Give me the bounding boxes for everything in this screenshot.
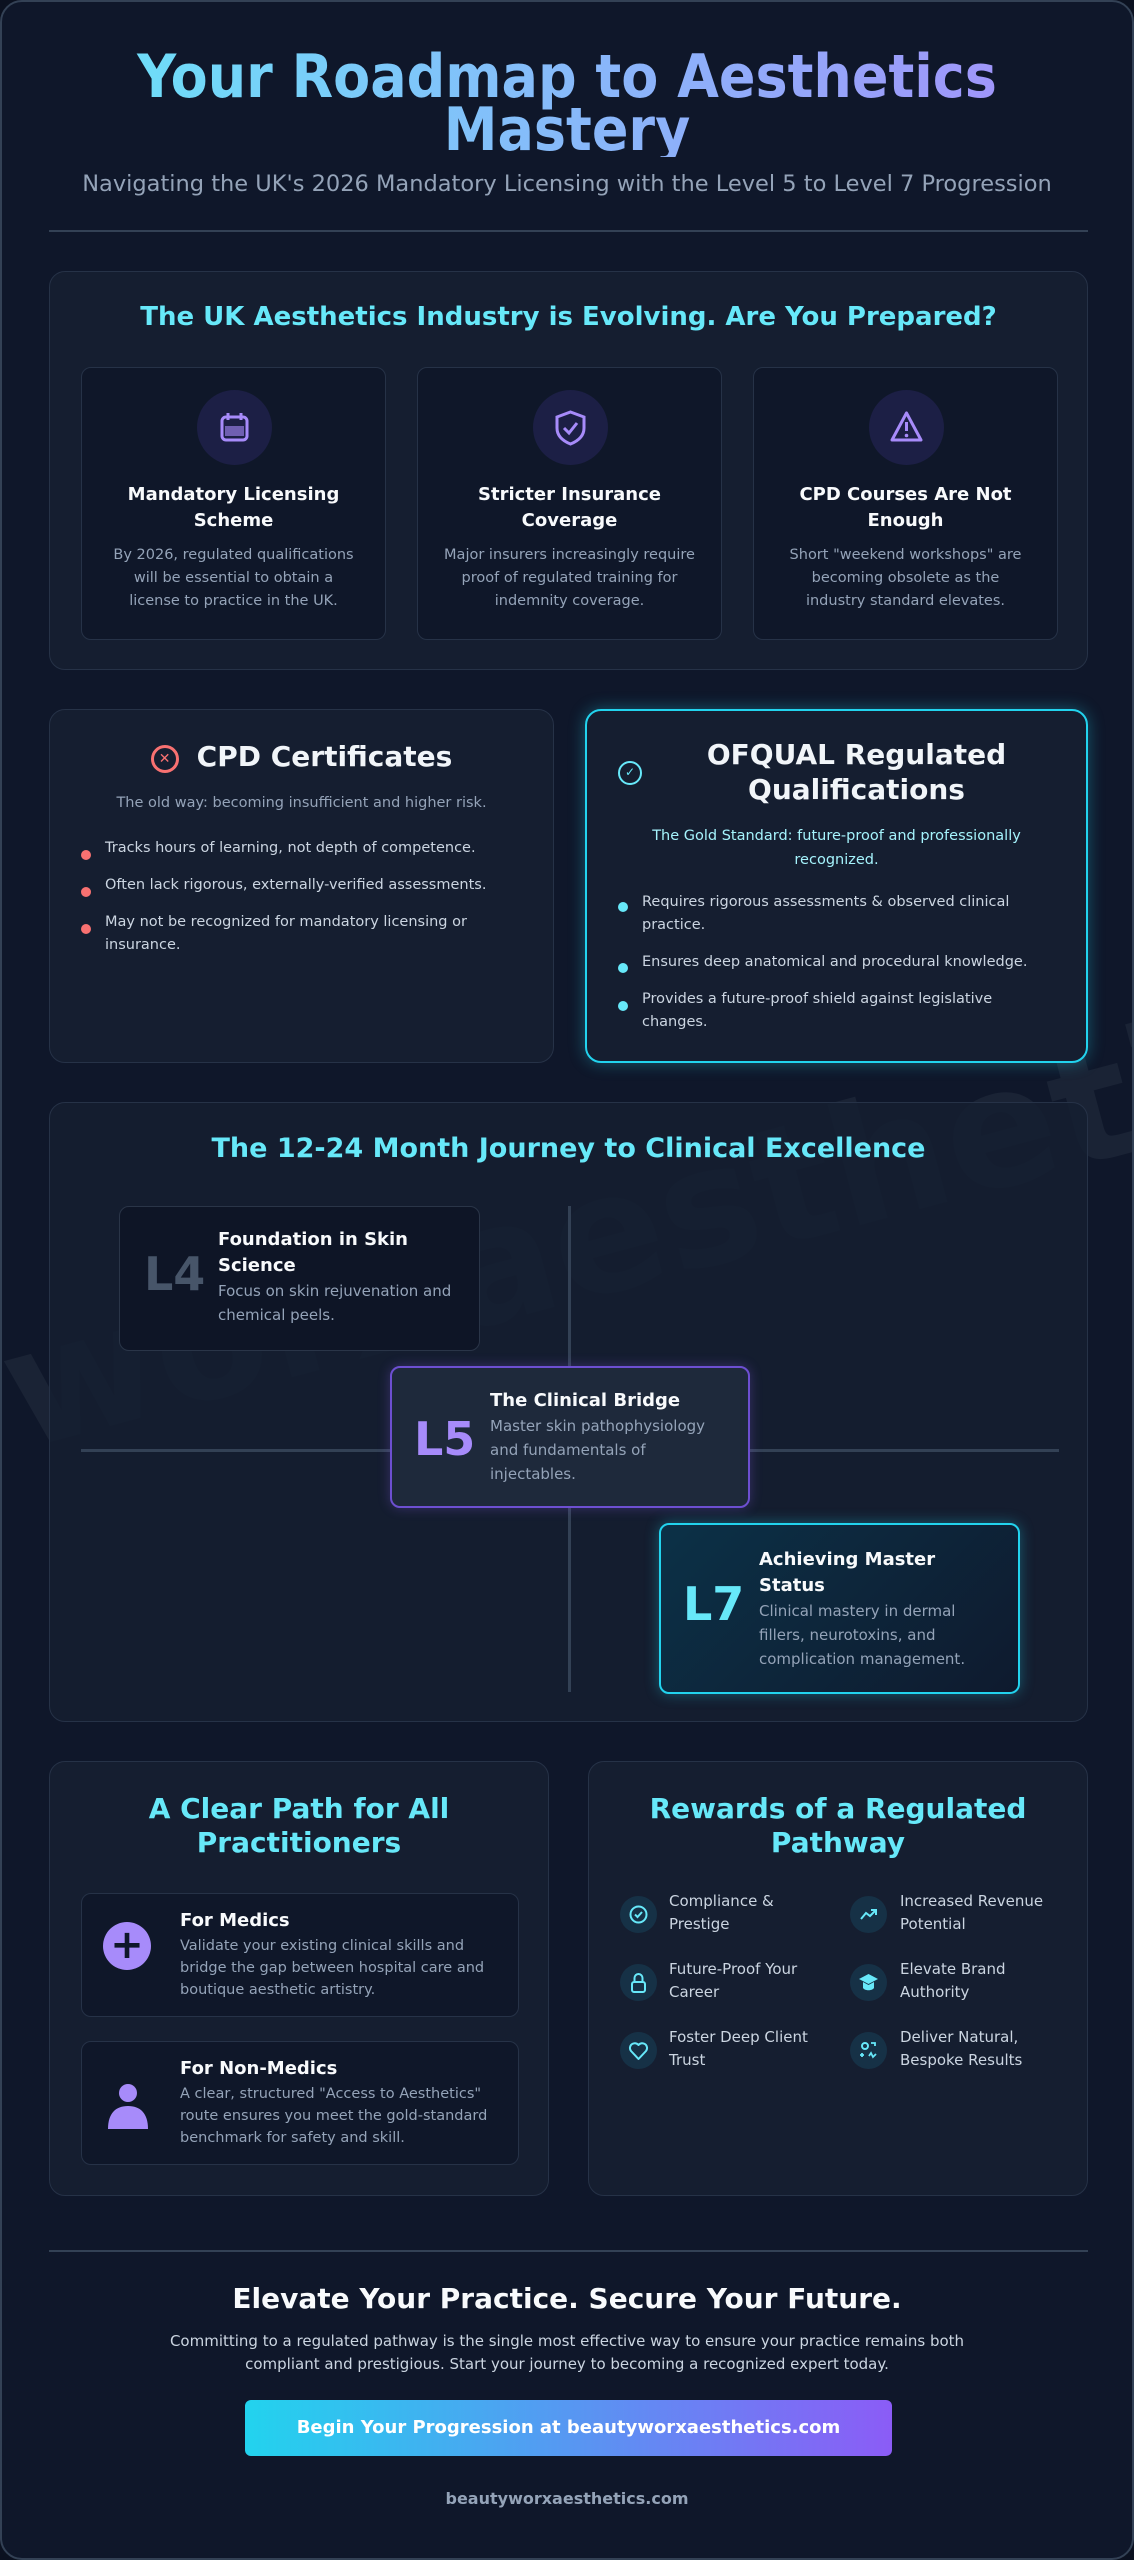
panel: CPD certificates <box>49 709 554 1063</box>
reward items: Deliver Natural, <box>900 2028 1018 2046</box>
card: insurance: Coverage <box>522 510 617 531</box>
heading: The 12-24 Month Journey to Clinical Excellence <box>211 1133 926 1164</box>
title: Your Roadmap to Aesthetics Mastery <box>137 42 997 165</box>
card: CPD not enough: Short "weekend workshops" are becoming obsolete as the industry standard elevates. <box>790 547 1021 609</box>
reward items: Authority <box>900 1983 969 2001</box>
card: CPD not enough: Enough <box>868 510 944 531</box>
reward items: Potential <box>900 1915 966 1933</box>
button <box>245 2400 892 2456</box>
icon: calendar <box>197 390 272 465</box>
icon: check: ✓ <box>625 765 635 779</box>
card: CPD not enough <box>753 367 1058 640</box>
card: medics: For Medics <box>180 1910 290 1931</box>
panel: rewards <box>588 1761 1088 2196</box>
bullets: Provides a future-proof shield against legislative changes. <box>642 991 992 1030</box>
card: licensing <box>81 367 386 640</box>
bullets: May not be recognized for mandatory licensing or insurance. <box>105 914 467 953</box>
bullets: Requires rigorous assessments & observed clinical practice. <box>642 894 1009 933</box>
button: Begin Your Progression at beautyworxaesthetics.com <box>297 2417 840 2438</box>
CTA text: Committing to a regulated pathway is the single most effective way to ensure your practice remains both compliant and prestigious. Start your journey to becoming a recognized expert today. <box>170 2332 964 2373</box>
panel: OFQUAL <box>585 709 1088 1063</box>
level card: L4: Science <box>218 1255 296 1276</box>
panel: CPD certificates: The old way: becoming insufficient and higher risk. <box>116 795 487 811</box>
bullets <box>81 840 486 953</box>
heading: The UK Aesthetics Industry is Evolving. Are You Prepared? <box>140 302 997 332</box>
CTA heading: Elevate Your Practice. Secure Your Future. <box>232 2282 902 2315</box>
icon: person <box>108 2084 148 2129</box>
heading: A Clear Path for All Practitioners <box>149 1792 449 1859</box>
icon: check <box>618 761 642 785</box>
panel: clear path <box>49 1761 549 2196</box>
bullets: Tracks hours of learning, not depth of competence. <box>105 840 476 856</box>
card: insurance <box>417 367 722 640</box>
level card: L5: L5 <box>414 1412 475 1466</box>
reward items: Future-Proof Your <box>669 1960 797 1978</box>
heading: OFQUAL Regulated Qualifications <box>707 738 1006 806</box>
heading: ✕ <box>159 751 171 767</box>
reward items: Bespoke Results <box>900 2051 1022 2069</box>
icon: plus <box>103 1922 151 1970</box>
level card: L4: Foundation in Skin <box>218 1229 408 1250</box>
card: non-medics <box>81 2041 519 2165</box>
bullets: Ensures deep anatomical and procedural knowledge. <box>642 954 1027 970</box>
heading: Rewards of a Regulated Pathway <box>650 1792 1026 1859</box>
level card: L7: Status <box>759 1575 825 1596</box>
bullets <box>618 894 1027 1030</box>
level card: L5: Master skin pathophysiology and fundamentals of injectables. <box>490 1417 705 1483</box>
panel: industry evolving <box>49 271 1088 670</box>
card: medics <box>81 1893 519 2017</box>
heading: CPD Certificates <box>197 740 452 773</box>
reward items: Prestige <box>669 1915 729 1933</box>
level card: L7: L7 <box>683 1577 744 1631</box>
reward items <box>620 1892 1043 2069</box>
level card: L7: Clinical mastery in dermal fillers, neurotoxins, and complication management. <box>759 1602 965 1668</box>
bullets: Often lack rigorous, externally-verified assessments. <box>105 877 486 893</box>
title <box>2 51 1132 157</box>
card: non-medics: A clear, structured "Access to Aesthetics" route ensures you meet the gold-standard benchmark for safety and skill. <box>180 2086 487 2146</box>
level card: L4: Focus on skin rejuvenation and chemical peels. <box>218 1282 451 1324</box>
panel: OFQUAL: The Gold Standard: future-proof and professionally recognized. <box>652 828 1021 868</box>
card: insurance: Major insurers increasingly require proof of regulated training for indemnity coverage. <box>444 547 695 609</box>
reward items: Compliance & <box>669 1892 774 1910</box>
level card: L7 <box>659 1523 1020 1694</box>
card: medics: Validate your existing clinical skills and bridge the gap between hospital care and boutique aesthetic artistry. <box>180 1938 484 1998</box>
level card: L5 <box>390 1366 750 1508</box>
reward items: Increased Revenue <box>900 1892 1043 1910</box>
icon: warning <box>869 390 944 465</box>
card: insurance: Stricter Insurance <box>478 484 661 505</box>
icon: plus: + <box>110 1922 144 1968</box>
reward items: Career <box>669 1983 719 2001</box>
reward items: Elevate Brand <box>900 1960 1006 1978</box>
panel: journey <box>49 1102 1088 1722</box>
card: non-medics: For Non-Medics <box>180 2058 337 2079</box>
level card: L4 <box>119 1206 480 1351</box>
card: licensing: By 2026, regulated qualifications will be essential to obtain a license to practice in the UK. <box>113 547 354 609</box>
level card: L5: The Clinical Bridge <box>490 1390 680 1411</box>
level card: L4: L4 <box>144 1247 205 1301</box>
reward items: Foster Deep Client <box>669 2028 808 2046</box>
card: CPD not enough: CPD Courses Are Not <box>799 484 1012 505</box>
icon: shield <box>533 390 608 465</box>
footer: beautyworxaesthetics.com <box>446 2489 688 2508</box>
reward items: Trust <box>669 2051 705 2069</box>
subtitle: Navigating the UK's 2026 Mandatory Licensing with the Level 5 to Level 7 Progression <box>82 171 1052 197</box>
card: licensing: Mandatory Licensing <box>128 484 339 505</box>
card: licensing: Scheme <box>194 510 273 531</box>
level card: L7: Achieving Master <box>759 1549 935 1570</box>
